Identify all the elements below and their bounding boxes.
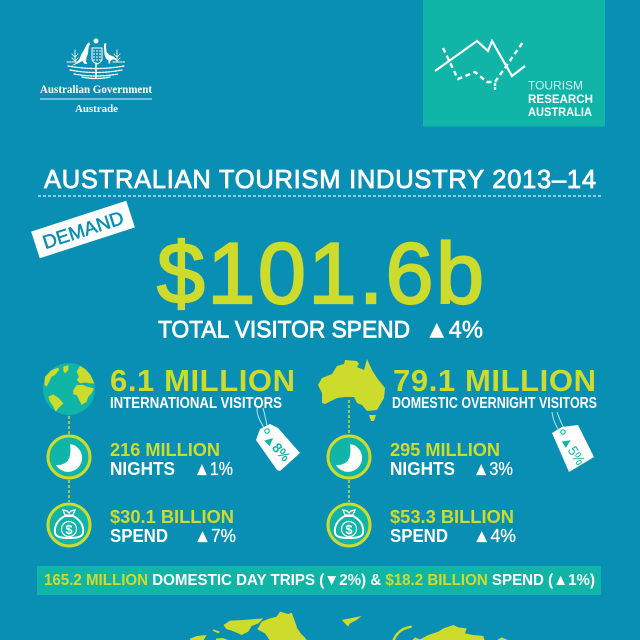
- stat: 6.1 million international visitors: INTERNATIONAL VISITORS: [110, 395, 282, 412]
- icon: map of Australia: [318, 359, 385, 421]
- panel: international visitors: [43, 363, 300, 546]
- text: tourism research australia: [528, 78, 593, 119]
- stat: spend: SPEND: [110, 526, 168, 546]
- headline: total visitor spend: TOTAL VISITOR SPEND: [158, 316, 410, 344]
- icon: moon: [48, 436, 90, 478]
- icon: globe: [43, 363, 95, 415]
- icon: money bag: [328, 504, 370, 546]
- text: tourism research australia: AUSTRALIA: [528, 105, 592, 119]
- panel: domestic overnight visitors: [318, 359, 597, 546]
- icon: moon: [328, 436, 370, 478]
- stat: spend: ▲4%: [473, 526, 516, 546]
- headline: total visitor spend: ▲4%: [425, 316, 483, 344]
- connector dashes: [348, 400, 350, 502]
- icon: price tag 5%: [552, 412, 594, 472]
- stat: spend: SPEND: [390, 526, 448, 546]
- stat: spend: $30.1 BILLION: [110, 507, 234, 527]
- title: AUSTRALIAN TOURISM INDUSTRY 2013–14: [44, 166, 596, 194]
- icon: price tag 8%: [256, 407, 300, 471]
- icon: money bag: $: [345, 522, 353, 537]
- stat: nights: ▲3%: [473, 459, 513, 479]
- stat: nights: 216 MILLION: [110, 440, 220, 460]
- map: world continents (cropped): [190, 612, 509, 640]
- logo: Australian Government Austrade: [40, 38, 152, 115]
- icon: money bag: [48, 504, 90, 546]
- stat: nights: [110, 440, 233, 479]
- stat: nights: NIGHTS: [390, 459, 455, 479]
- stat: 79.1 million domestic overnight visitors: DOMESTIC OVERNIGHT VISITORS: [392, 395, 597, 412]
- banner: domestic day trips: 165.2 MILLION DOMESTIC DAY TRIPS (▼2%) & $18.2 BILLION SPEND (▲1%): [44, 572, 595, 589]
- icon: money bag: $: [65, 522, 73, 537]
- stat: nights: [390, 440, 513, 479]
- connector dashes: [68, 416, 70, 502]
- banner: domestic day trips: [37, 566, 601, 595]
- headline: total visitor spend: $101.6b: [157, 226, 484, 322]
- stat: nights: ▲1%: [194, 459, 233, 479]
- text: tourism research australia: TOURISM: [528, 78, 583, 92]
- logo: Tourism Research Australia: [423, 0, 605, 126]
- stat: spend: [390, 507, 516, 546]
- icon: price tag 8%: ▲8%: [260, 430, 294, 465]
- icon: coat of arms: [67, 38, 125, 78]
- label: demand: DEMAND: [40, 208, 127, 254]
- icon: price tag 5%: ▲5%: [558, 432, 589, 468]
- text: tourism research australia: RESEARCH: [528, 92, 593, 106]
- stat: nights: 295 MILLION: [390, 440, 500, 460]
- stat: spend: ▲7%: [194, 526, 236, 546]
- label: demand: [31, 201, 135, 258]
- stat: spend: $53.3 BILLION: [390, 507, 514, 527]
- text: Australian Government: Australian Government: [40, 82, 152, 96]
- stat: 6.1 million international visitors: 6.1 MILLION: [110, 363, 295, 398]
- icon: line chart mark: [435, 41, 525, 90]
- stat: spend: [110, 507, 236, 546]
- stat: 79.1 million domestic overnight visitors: 79.1 MILLION: [393, 363, 596, 398]
- text: Austrade: Austrade: [75, 103, 118, 115]
- stat: nights: NIGHTS: [110, 459, 175, 479]
